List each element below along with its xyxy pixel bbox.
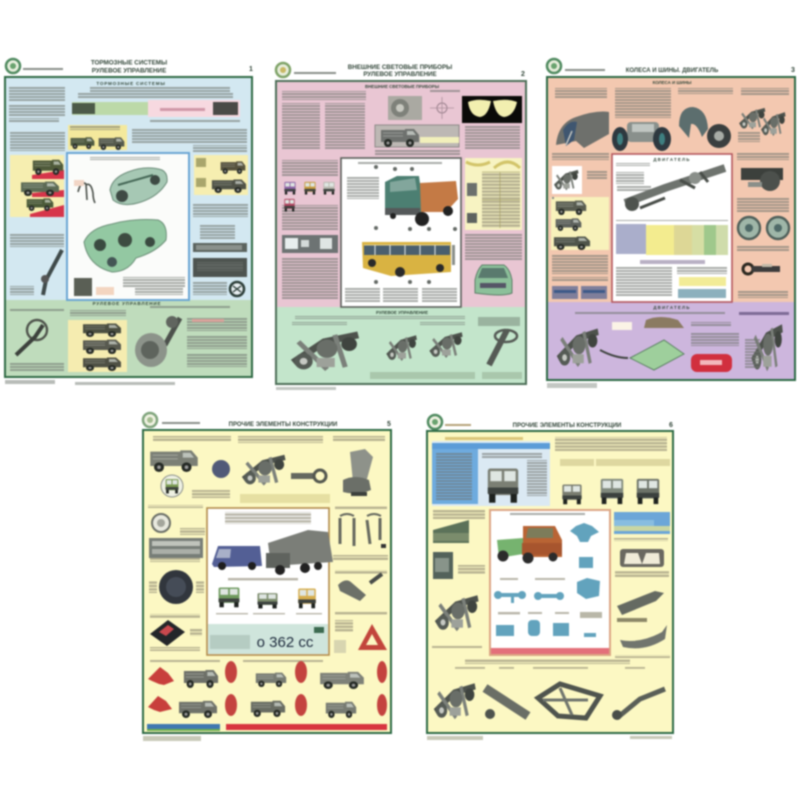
truck coloured (497, 526, 562, 564)
warning triangle (334, 620, 387, 653)
panel: brake diagram (67, 153, 189, 300)
poster number: 2 (521, 71, 525, 78)
headlamp photo (388, 96, 422, 120)
yellow panel: vehicles (68, 310, 127, 372)
frame parts left (436, 598, 478, 630)
car with brake circuit (110, 168, 167, 205)
logo (547, 59, 605, 73)
frame (143, 430, 391, 733)
text block: engine top (616, 163, 651, 191)
driver cab detail (161, 460, 230, 498)
title: РУЛЕВОЕ УПРАВЛЕНИЕ (363, 71, 437, 78)
panel: background (143, 430, 391, 733)
logo (6, 59, 63, 73)
text block: steering (292, 316, 522, 379)
steering column (489, 330, 517, 365)
text block: parking brake (10, 234, 64, 247)
heading: lower section (465, 659, 630, 664)
heading: brakes: ТОРМОЗНЫЕ СИСТЕМЫ (96, 81, 166, 86)
title: РУЛЕВОЕ УПРАВЛЕНИЕ (92, 68, 166, 74)
headlight beams on dark (462, 96, 522, 123)
frame assembly one (435, 686, 475, 718)
frame assembly two (485, 688, 528, 719)
mechanism (243, 457, 285, 484)
footer text (547, 383, 597, 388)
left wheel hoist and car panel (551, 166, 609, 250)
diagram strips (193, 243, 247, 277)
heading: engine section: ДВИГАТЕЛЬ (653, 305, 691, 310)
text block: right column (193, 145, 248, 295)
captions (498, 578, 602, 618)
frame (5, 77, 252, 377)
panel: steering background (5, 300, 252, 377)
logo (143, 413, 200, 427)
tyre cutaway (556, 112, 609, 148)
text blocks: brakes top (9, 87, 247, 151)
three front views (216, 578, 322, 615)
panel: vehicle lights diagram (341, 158, 461, 307)
panel: background (427, 431, 673, 733)
panel: main vehicles (207, 508, 333, 655)
frame (427, 431, 673, 733)
steering gear left (387, 338, 416, 360)
callout dots (374, 165, 457, 284)
brake distance strip (72, 100, 240, 117)
frame (276, 81, 526, 384)
road photo (433, 520, 469, 543)
yellow panel: right cars (194, 155, 248, 195)
licence plate (208, 624, 328, 654)
blue van (212, 546, 262, 570)
truck front view large (488, 469, 518, 503)
heading: steering: РУЛЕВОЕ УПРАВЛЕНИЕ (93, 301, 161, 306)
seat (343, 449, 373, 496)
panel: brake systems background (5, 77, 252, 300)
panel: engine background (547, 302, 795, 380)
brake parts (74, 180, 95, 203)
red strip (491, 648, 609, 654)
panel: wheels background (547, 77, 795, 302)
bottom stripes (147, 724, 387, 731)
poster number: 5 (387, 421, 391, 428)
title: КОЛЕСА И ШИНЫ. ДВИГАТЕЛЬ (626, 68, 719, 74)
tool (743, 264, 780, 274)
beam diagram small (430, 97, 454, 119)
panel notes (74, 277, 185, 296)
text blocks (432, 437, 670, 658)
panel: steering background (276, 307, 526, 384)
poster 2: lighting and steering (276, 63, 526, 390)
bus yellow (362, 242, 455, 277)
footer text (143, 736, 201, 741)
poster 5: other design elements (427, 415, 673, 740)
mud flap row one (148, 661, 387, 689)
truck beam diagram (375, 125, 459, 147)
frame (547, 77, 795, 380)
axle photo (741, 168, 783, 191)
poster 1: brakes and steering (5, 59, 253, 385)
frame assembly three (538, 684, 600, 718)
lamp legend (345, 287, 457, 303)
dark plate (282, 235, 338, 253)
towing parts (338, 574, 382, 601)
engine data table (616, 220, 728, 255)
blue parts row two (496, 620, 596, 637)
title (348, 64, 452, 78)
wheel mounts (552, 286, 607, 299)
logo (428, 415, 471, 429)
poster number: 3 (791, 67, 795, 74)
wheel hub parts (738, 110, 785, 142)
title: ТОРМОЗНЫЕ СИСТЕМЫ (91, 60, 167, 66)
brake drums (738, 217, 789, 239)
truck chassis diagram (84, 220, 166, 272)
grey truck (266, 530, 333, 575)
icon: parking lever (10, 250, 62, 295)
text block: panel heading (225, 512, 311, 524)
text blocks: lighting (282, 90, 522, 299)
title: ВНЕШНИЕ СВЕТОВЫЕ ПРИБОРЫ (348, 64, 452, 71)
heading: wheels: КОЛЕСА И ШИНЫ (653, 80, 691, 85)
panel: truck and parts (490, 510, 610, 655)
blue axle parts row one (494, 591, 564, 603)
lamp icons (284, 182, 335, 212)
blue water photo (614, 512, 670, 534)
instrument strip (149, 538, 203, 558)
heading: steering: РУЛЕВОЕ УПРАВЛЕНИЕ (376, 310, 428, 315)
text block left of truck (347, 177, 379, 199)
table: blue (432, 437, 550, 506)
speedometer sign (152, 514, 170, 532)
poster 4: other design elements (143, 413, 391, 741)
steering mechanism (293, 335, 358, 369)
cab frame part (620, 549, 664, 567)
blue part: top right (570, 523, 600, 599)
table: lamp colours (465, 158, 522, 230)
heading: lighting: ВНЕШНИЕ СВЕТОВЫЕ ПРИБОРЫ (365, 84, 439, 89)
footer text (427, 736, 672, 740)
truck top left (150, 450, 198, 472)
dark disc (149, 570, 204, 604)
frame assembly four (612, 689, 665, 720)
icon: steering column (135, 316, 180, 367)
panel: engine diagram (612, 154, 732, 302)
door lock (291, 470, 326, 482)
text blocks (148, 436, 388, 663)
truck colored (385, 176, 458, 226)
three front views (562, 479, 659, 504)
poster number: 1 (249, 66, 253, 73)
title: ПРОЧИЕ ЭЛЕМЕНТЫ КОНСТРУКЦИИ (513, 423, 621, 429)
road texture (433, 533, 469, 541)
cab photo (433, 552, 485, 579)
poster number: 6 (669, 422, 673, 429)
poster 3: wheels tyres engine (547, 59, 795, 388)
seat belts (340, 514, 386, 548)
tyre sections (679, 107, 731, 148)
car with wheels (612, 122, 671, 151)
bumper parts (617, 591, 667, 648)
licence plate: о 362 сс (257, 634, 314, 651)
gas cylinder (691, 354, 732, 372)
text blocks: engine bottom (616, 260, 727, 298)
icon: round sign (230, 282, 244, 296)
logo (276, 63, 336, 77)
gas engine diagram (558, 317, 684, 370)
heading: engine: ДВИГАТЕЛЬ (653, 157, 691, 162)
first aid kit (150, 620, 202, 646)
engine parts right (745, 328, 782, 370)
footer text (276, 387, 336, 390)
text blocks: wheels (552, 88, 789, 298)
engine layout diagram (625, 168, 725, 211)
text block: engine section (575, 312, 789, 346)
car front (475, 265, 512, 295)
panel: lighting background (276, 81, 526, 307)
footer text (5, 380, 175, 385)
mud flap row two (148, 694, 387, 718)
icon: steering wheel left (10, 308, 64, 371)
steering gear right (431, 334, 462, 357)
text captions (455, 667, 645, 669)
title (91, 60, 167, 74)
title: ПРОЧИЕ ЭЛЕМЕНТЫ КОНСТРУКЦИИ (229, 422, 337, 428)
yellow and red panel: slopes (10, 155, 64, 217)
text block: steering (150, 305, 247, 367)
yellow panel: cars (68, 125, 127, 150)
